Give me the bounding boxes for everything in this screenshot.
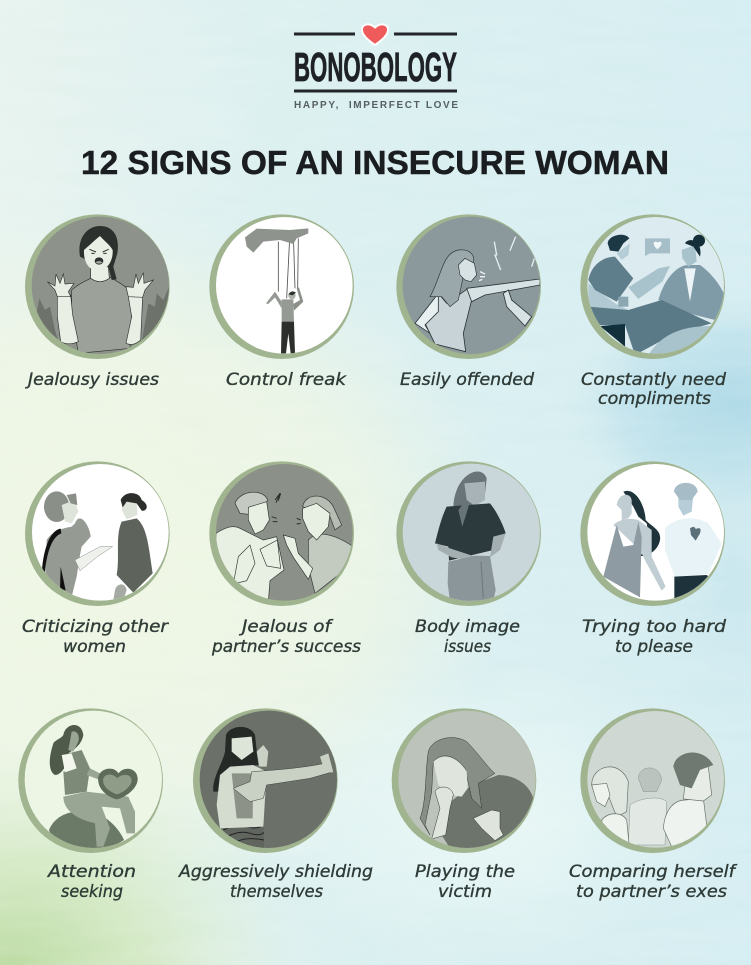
icon: heart [362, 24, 388, 45]
icon: attention seeking [18, 708, 167, 853]
label: criticizing other women [22, 617, 169, 657]
label: body image issues: issues [444, 637, 491, 657]
label: jealousy issues: Jealousy issues [25, 370, 159, 390]
icon: jealous of partner's success [209, 461, 357, 606]
logo: Bonobology: BONOBOLOGY [294, 44, 457, 90]
icon: constantly need compliments [580, 214, 728, 359]
logo: Bonobology: HAPPY, IMPERFECT LOVE [294, 100, 458, 111]
label: trying too hard to please [582, 617, 726, 657]
icon: body image issues [396, 461, 544, 606]
icon: easily offended [396, 214, 544, 359]
icon: comparing herself to partner's exes [580, 708, 728, 853]
label: attention seeking [47, 862, 136, 902]
label: control freak: Control freak [226, 370, 347, 390]
label: comparing herself to partner's exes: to partner’s exes [576, 882, 727, 902]
label: playing the victim: victim [438, 882, 492, 902]
label: comparing herself to partner's exes [569, 862, 738, 902]
label: trying too hard to please: Trying too hard [582, 617, 726, 637]
label: attention seeking: Attention [47, 862, 136, 882]
label: jealous of partner's success [211, 617, 361, 657]
icon: playing the victim [392, 708, 538, 853]
icon: aggressively shielding themselves [193, 708, 340, 853]
title: 12 SIGNS OF AN INSECURE WOMAN [81, 144, 669, 181]
label: playing the victim: Playing the [415, 862, 515, 882]
label: attention seeking: seeking [61, 882, 123, 902]
label: playing the victim [415, 862, 515, 902]
label: constantly need compliments: compliments [598, 389, 711, 409]
label: comparing herself to partner's exes: Comparing herself [569, 862, 738, 882]
label: constantly need compliments [581, 370, 726, 409]
label: jealous of partner's success: partner’s success [211, 637, 361, 657]
label: trying too hard to please: to please [615, 637, 693, 657]
label: body image issues [415, 617, 520, 657]
icon: trying too hard to please [580, 461, 728, 606]
label: criticizing other women: Criticizing other [22, 617, 169, 637]
logo: Bonobology [294, 24, 458, 111]
label: constantly need compliments: Constantly need [581, 370, 726, 390]
label: aggressively shielding themselves: themselves [230, 882, 323, 902]
icon: control freak [209, 214, 357, 359]
icon: jealousy issues [25, 214, 173, 359]
icon: criticizing other women [25, 461, 173, 606]
label: aggressively shielding themselves: Aggressively shielding [178, 862, 373, 882]
label: easily offended: Easily offended [400, 370, 534, 390]
label: jealous of partner's success: Jealous of [239, 617, 334, 637]
label: criticizing other women: women [63, 637, 126, 657]
label: body image issues: Body image [415, 617, 520, 637]
label: aggressively shielding themselves [178, 862, 373, 902]
